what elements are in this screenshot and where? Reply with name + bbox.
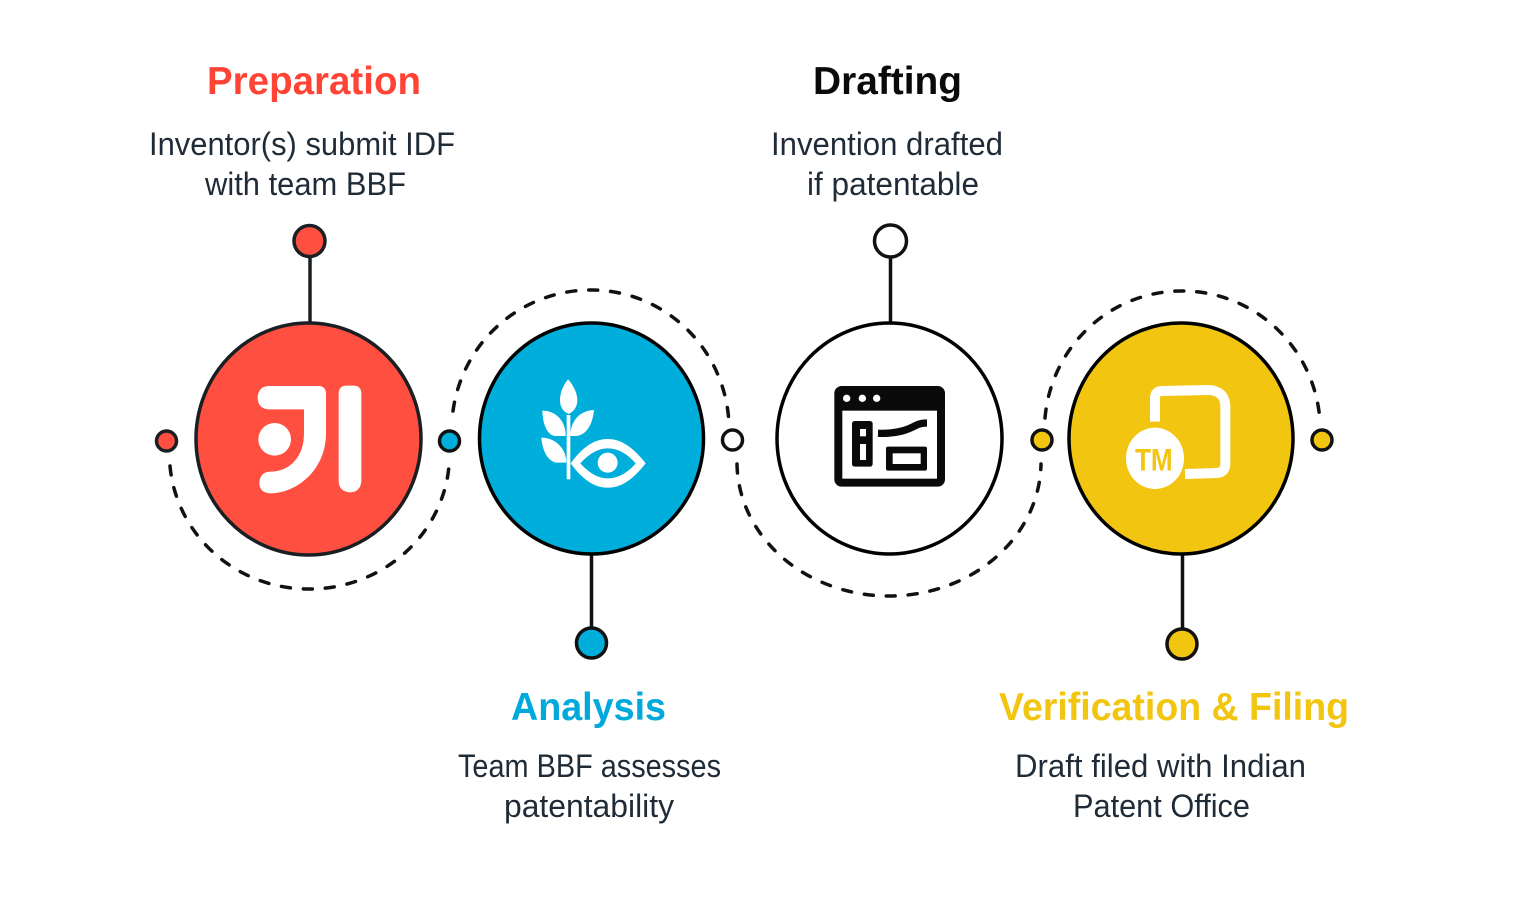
dashed connector arcs <box>170 290 1320 596</box>
circle: verification <box>1069 323 1293 554</box>
text: drafting description: Invention drafted <box>771 126 1003 162</box>
node: white dot <box>722 430 742 450</box>
icon: abstract JI mark <box>258 386 361 493</box>
step 4: verification and filing <box>999 323 1349 824</box>
text: preparation description <box>149 126 455 202</box>
text: preparation description: with team BBF <box>204 166 406 202</box>
icon: plant and eye <box>541 379 646 488</box>
circle: drafting <box>777 323 1002 554</box>
pin: verification <box>1167 554 1197 659</box>
icon: trademark document: TM <box>1135 442 1173 478</box>
text: analysis description <box>458 748 721 824</box>
heading: Verification & Filing: Verification & Filing <box>999 686 1349 729</box>
heading: Analysis: Analysis <box>511 686 666 729</box>
pin: drafting <box>874 225 906 324</box>
node: blue dot <box>440 431 460 451</box>
heading: Preparation: Preparation <box>207 60 421 103</box>
icon: browser window <box>834 386 945 487</box>
step 1: preparation <box>149 60 455 555</box>
step 2: analysis <box>440 323 721 824</box>
text: drafting description: if patentable <box>807 166 979 202</box>
text: analysis description: patentability <box>504 788 674 824</box>
text: analysis description: Team BBF assesses <box>458 748 721 784</box>
text: verification description: Draft filed with Indian <box>1015 748 1306 784</box>
node: yellow dot right <box>1312 430 1332 450</box>
circle: preparation <box>196 323 421 555</box>
text: drafting description <box>771 126 1003 202</box>
step 3: drafting <box>722 60 1003 554</box>
icon: trademark document <box>1126 390 1225 489</box>
node: red dot left <box>156 431 176 451</box>
text: verification description: Patent Office <box>1073 788 1250 824</box>
node: yellow dot left <box>1032 430 1052 450</box>
text: verification description <box>1015 748 1306 824</box>
pin: preparation <box>294 226 325 324</box>
pin: analysis <box>576 554 606 658</box>
circle: analysis <box>480 323 704 554</box>
heading: Drafting: Drafting <box>813 60 962 103</box>
text: preparation description: Inventor(s) submit IDF <box>149 126 455 162</box>
